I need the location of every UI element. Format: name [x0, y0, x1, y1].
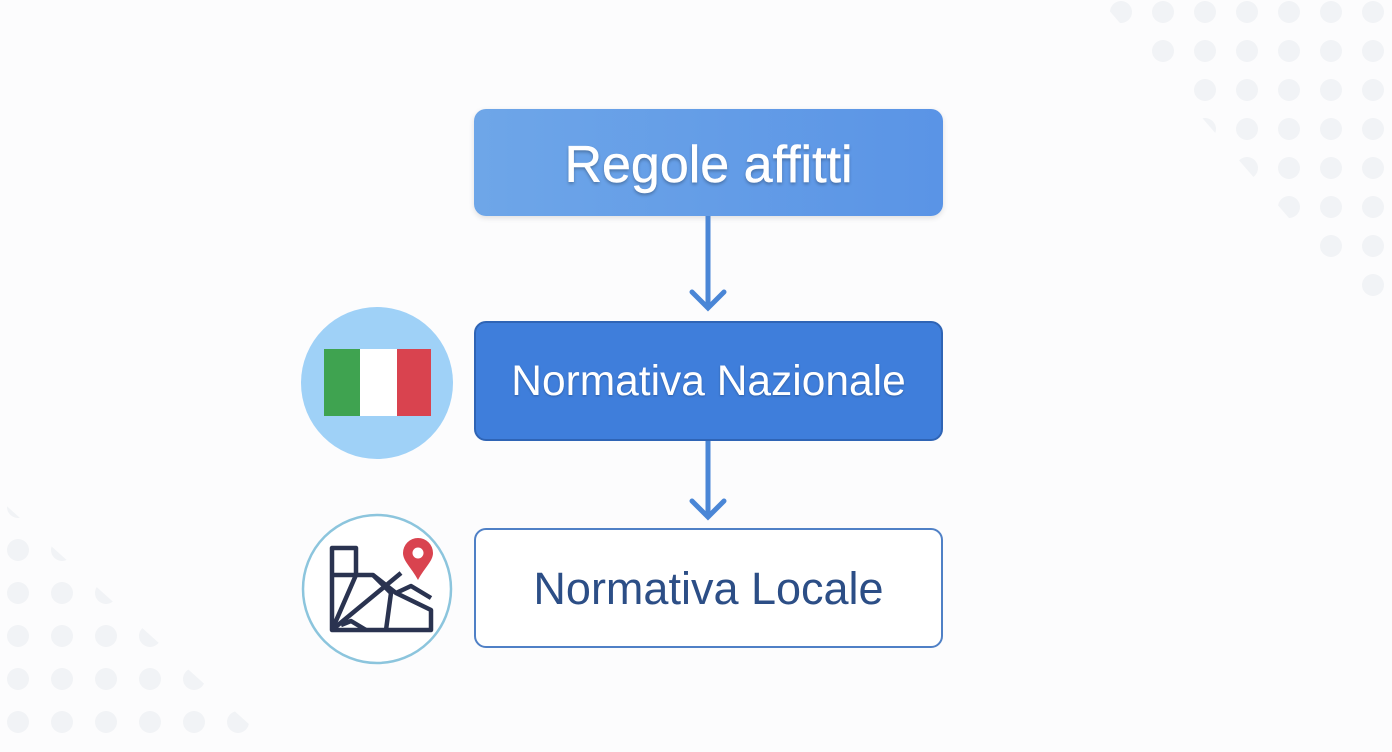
- box: Regole affitti: [474, 109, 943, 216]
- icon: local map with pin: [302, 514, 452, 664]
- arrow 2: [690, 441, 726, 520]
- box: Regole affitti: Regole affitti: [564, 136, 853, 194]
- arrow 1: [690, 216, 726, 312]
- box: Normativa Locale: Normativa Locale: [533, 563, 884, 614]
- box: Normativa Locale: [474, 528, 943, 648]
- box: Normativa Nazionale: Normativa Nazionale: [511, 358, 906, 405]
- icon: Italian flag: [301, 307, 453, 459]
- box: Normativa Nazionale: [474, 321, 943, 441]
